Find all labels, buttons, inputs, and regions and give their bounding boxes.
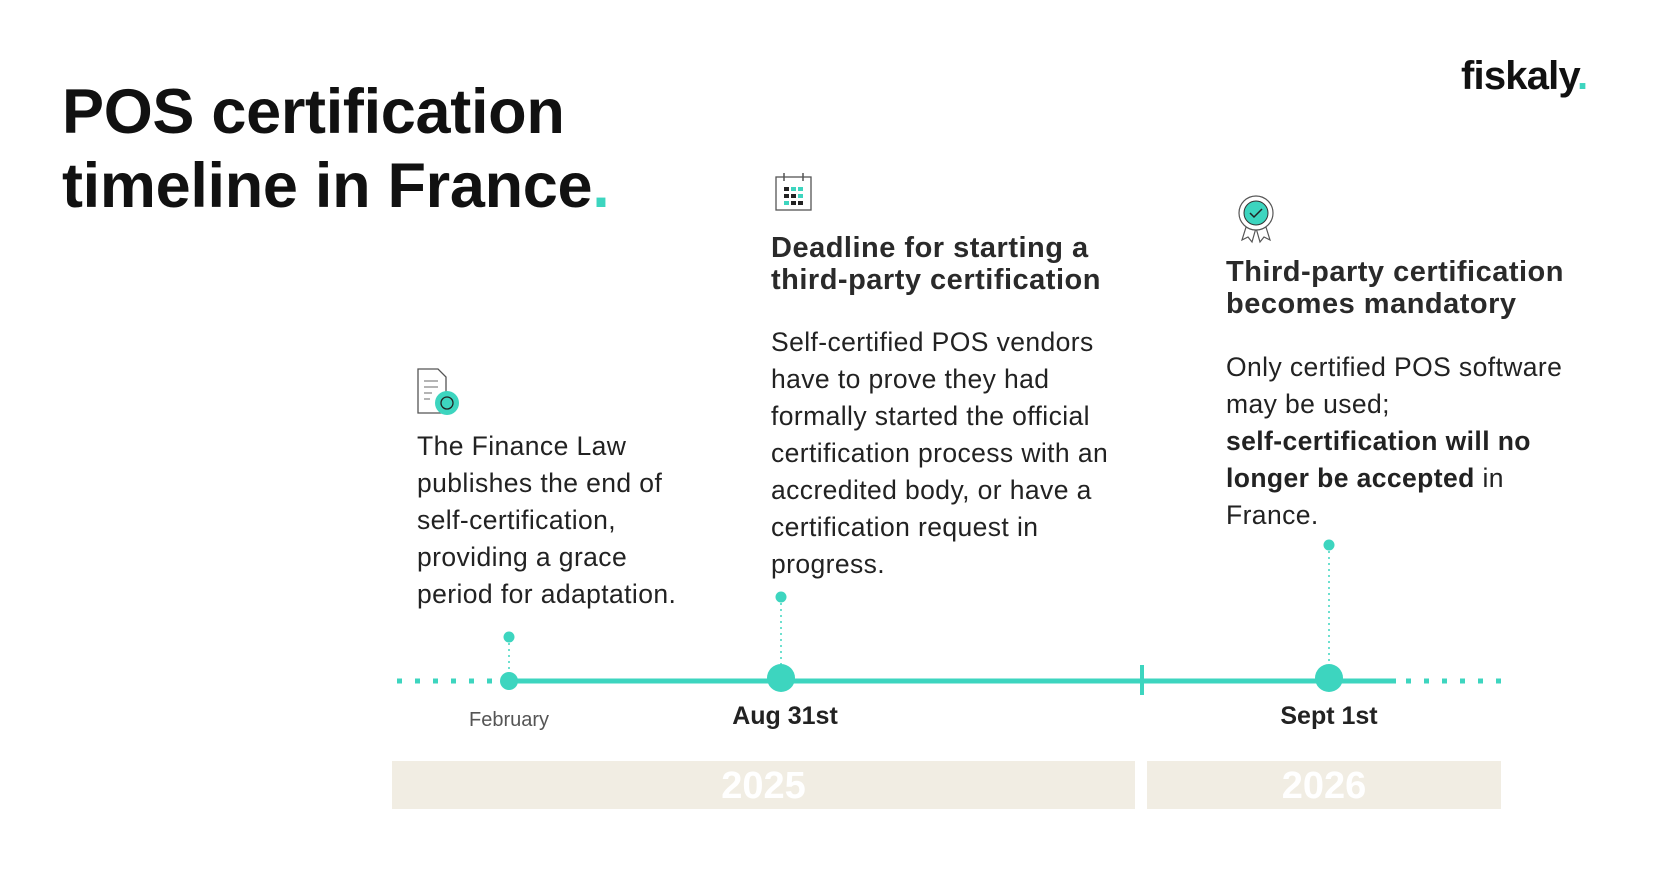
title: timeline in France. [62, 151, 609, 221]
text: mandatory body: longer be accepted in [1226, 463, 1504, 493]
text: February event: self-certification, [417, 505, 616, 535]
year bar 2025: 2025 [721, 765, 806, 807]
text: February event: The Finance Law [417, 431, 626, 461]
year bar 2026: 2026 [1282, 765, 1366, 807]
text: mandatory body: France. [1226, 500, 1319, 530]
icon: calendar [775, 173, 812, 211]
icon: document [417, 368, 459, 415]
text: deadline body: Self-certified POS vendors [771, 327, 1094, 357]
text: deadline body: formally started the official [771, 401, 1090, 431]
text: deadline body: have to prove they had [771, 364, 1049, 394]
year bar 2026 [1147, 761, 1501, 809]
text: deadline body [771, 327, 1108, 579]
text: February event: publishes the end of [417, 468, 662, 498]
year bar 2025 [392, 761, 1135, 809]
text: February event [417, 431, 676, 609]
text: deadline body: certification process with an [771, 438, 1108, 468]
heading: deadline [771, 232, 1101, 296]
logo: fiskaly. [1461, 54, 1587, 98]
label: Aug 31st: Aug 31st [732, 702, 838, 730]
text: February event: providing a grace [417, 542, 627, 572]
text: deadline body: certification request in [771, 512, 1038, 542]
heading: deadline: third-party certification [771, 264, 1101, 296]
title [62, 77, 609, 221]
timeline [397, 540, 1501, 695]
heading: mandatory [1226, 256, 1564, 320]
text: mandatory body: Only certified POS software [1226, 352, 1562, 382]
heading: deadline: Deadline for starting a [771, 232, 1089, 264]
heading: mandatory: Third-party certification [1226, 256, 1564, 288]
text: mandatory body [1226, 352, 1562, 530]
text: deadline body: progress. [771, 549, 885, 579]
text: February event: period for adaptation. [417, 579, 676, 609]
label: February: February [469, 709, 549, 731]
icon: certificate badge [1238, 195, 1274, 244]
text: mandatory body: may be used; [1226, 389, 1390, 419]
text: deadline body: accredited body, or have a [771, 475, 1092, 505]
label: Sept 1st: Sept 1st [1280, 702, 1378, 730]
text: mandatory body: self-certification will no [1226, 426, 1531, 456]
title: POS certification [62, 77, 565, 147]
heading: mandatory: becomes mandatory [1226, 288, 1517, 320]
